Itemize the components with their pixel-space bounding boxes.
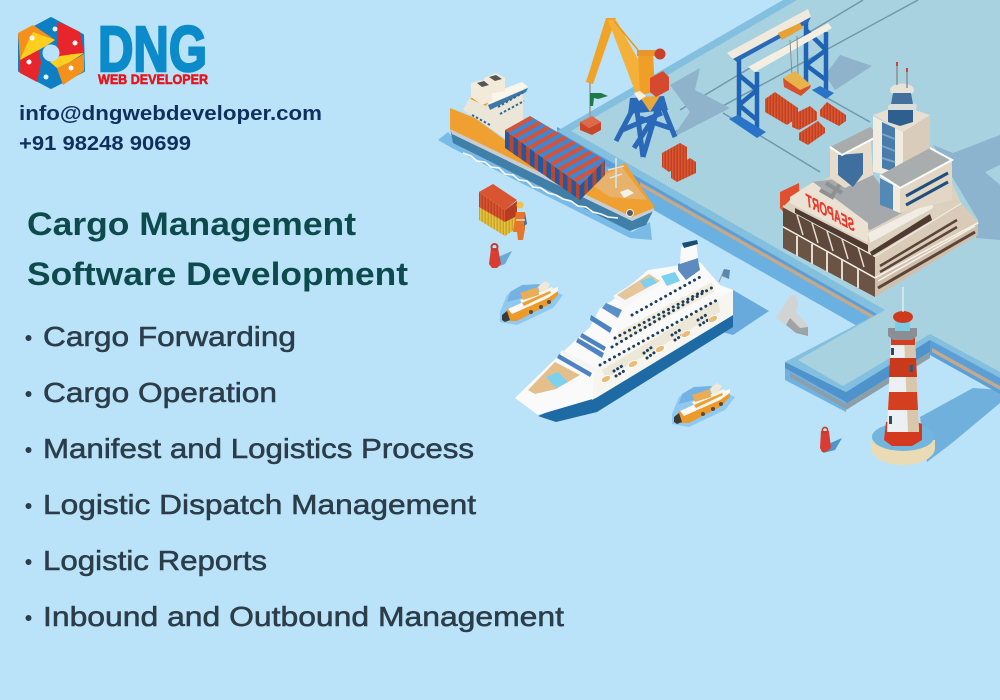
flag — [719, 270, 724, 282]
front legs — [739, 58, 757, 131]
machine house — [650, 71, 669, 97]
quay containers — [662, 143, 696, 182]
lighthouse — [871, 287, 935, 465]
block A — [830, 127, 873, 188]
lifeboats — [600, 314, 719, 384]
crane shadow — [670, 68, 730, 138]
forward stripes — [557, 354, 592, 377]
mast — [902, 287, 904, 312]
mooring pale shadows — [985, 165, 1000, 185]
main quay wall — [557, 127, 885, 325]
heading line 1: Cargo Management — [27, 206, 356, 242]
item: dispatch: Logistic Dispatch Management — [43, 489, 476, 520]
control tower — [888, 100, 917, 118]
hanging container — [580, 116, 601, 135]
logo: DNG hexagon swirl — [18, 18, 84, 88]
side wall — [592, 290, 733, 400]
heading line 2: Software Development — [27, 256, 408, 292]
funnel — [678, 258, 700, 280]
item: inbound outbound: Inbound and Outbound Management — [43, 601, 564, 632]
terminal building — [780, 62, 978, 297]
ship wake — [438, 132, 652, 240]
gantry legs — [616, 100, 675, 157]
lower floor posts — [797, 236, 858, 288]
bridge windows — [472, 92, 524, 125]
red plinth — [884, 421, 922, 446]
rear legs — [806, 18, 826, 92]
lower floor white rim — [783, 222, 978, 277]
hull: blue — [450, 128, 655, 231]
red bands — [891, 337, 915, 345]
anchor on deck — [820, 183, 842, 198]
dock surface — [571, 0, 1000, 386]
block C — [900, 160, 952, 213]
counterweight ball — [654, 48, 666, 60]
lower floor right — [875, 222, 978, 297]
waterline waves — [463, 153, 618, 218]
lower windows — [614, 315, 708, 376]
container stacks — [505, 130, 605, 200]
superstructure — [463, 88, 523, 138]
tugboat lower — [672, 383, 735, 427]
deck hatches — [620, 189, 634, 198]
tugboat upper — [500, 281, 563, 325]
logo wordmark: DNG: DNG — [98, 13, 207, 85]
upper floor right — [875, 203, 978, 277]
balconies — [602, 300, 720, 378]
ship name: LOGISTIC — [549, 168, 581, 192]
main quay tan strip — [640, 182, 880, 323]
spreader container — [783, 71, 811, 92]
funnels — [471, 80, 492, 105]
lantern roof — [893, 311, 913, 323]
panel: port dock — [557, 0, 1000, 462]
contact phone: +91 98248 90699 — [19, 133, 191, 155]
hull blue — [538, 314, 733, 422]
green flag — [590, 93, 608, 106]
cruise ship — [515, 240, 769, 422]
upper deck — [613, 272, 665, 307]
ship mast — [608, 158, 624, 188]
white slab — [868, 201, 933, 243]
jib arms — [586, 18, 616, 84]
sign slab — [790, 182, 868, 243]
upper rim — [783, 203, 961, 256]
gallery — [888, 328, 917, 340]
red sign box — [780, 183, 800, 213]
contact email: info@dngwebdeveloper.com — [19, 103, 322, 125]
tower white — [887, 337, 919, 432]
pier left wall — [785, 362, 846, 402]
item: reports: Logistic Reports — [43, 545, 267, 576]
right quay wall — [930, 338, 1000, 394]
anchor monument — [776, 295, 808, 336]
roof deck — [783, 172, 961, 256]
buoy left — [489, 244, 512, 268]
cruise shadow — [722, 290, 769, 335]
yard containers — [765, 92, 846, 145]
bow deck — [528, 362, 580, 394]
worker and stack — [479, 184, 527, 240]
bow porthole — [626, 210, 634, 216]
building shadow — [933, 135, 1000, 240]
logo wordmark: web developer: WEB DEVELOPER — [98, 71, 208, 87]
central tower — [873, 116, 903, 178]
list: cargo services — [26, 321, 564, 632]
window rows — [600, 277, 717, 365]
pier left wall shadow — [785, 362, 846, 412]
gantry shadow — [825, 55, 872, 90]
windows — [891, 348, 894, 355]
lighthouse shadow — [920, 388, 1000, 462]
lower floor left — [783, 227, 875, 297]
sand base — [871, 440, 935, 465]
antennas — [897, 64, 907, 88]
dark band — [795, 208, 868, 252]
hull white — [515, 262, 733, 415]
pier right wall — [846, 338, 930, 404]
gantry crane — [727, 9, 846, 145]
dock rim — [557, 0, 1000, 392]
water ring — [872, 423, 934, 451]
hook cable — [589, 83, 591, 117]
cargo ship — [438, 73, 655, 240]
sign text: SEAPORT — [805, 190, 855, 236]
tower — [638, 52, 655, 95]
item: cargo operation: Cargo Operation — [43, 377, 277, 408]
beams — [727, 9, 811, 59]
worker — [513, 212, 525, 240]
item: cargo forwarding: Cargo Forwarding — [43, 321, 296, 352]
trolley — [778, 23, 803, 40]
bow deck — [587, 167, 647, 200]
upper floor left — [783, 207, 875, 277]
port crane — [580, 18, 675, 157]
spreader cables — [790, 36, 798, 76]
buoy right — [820, 427, 842, 453]
main quay wall shadow — [557, 127, 885, 339]
item: manifest: Manifest and Logistics Process — [43, 433, 474, 464]
hull: orange — [450, 108, 655, 218]
dock lane lines — [673, 0, 918, 172]
